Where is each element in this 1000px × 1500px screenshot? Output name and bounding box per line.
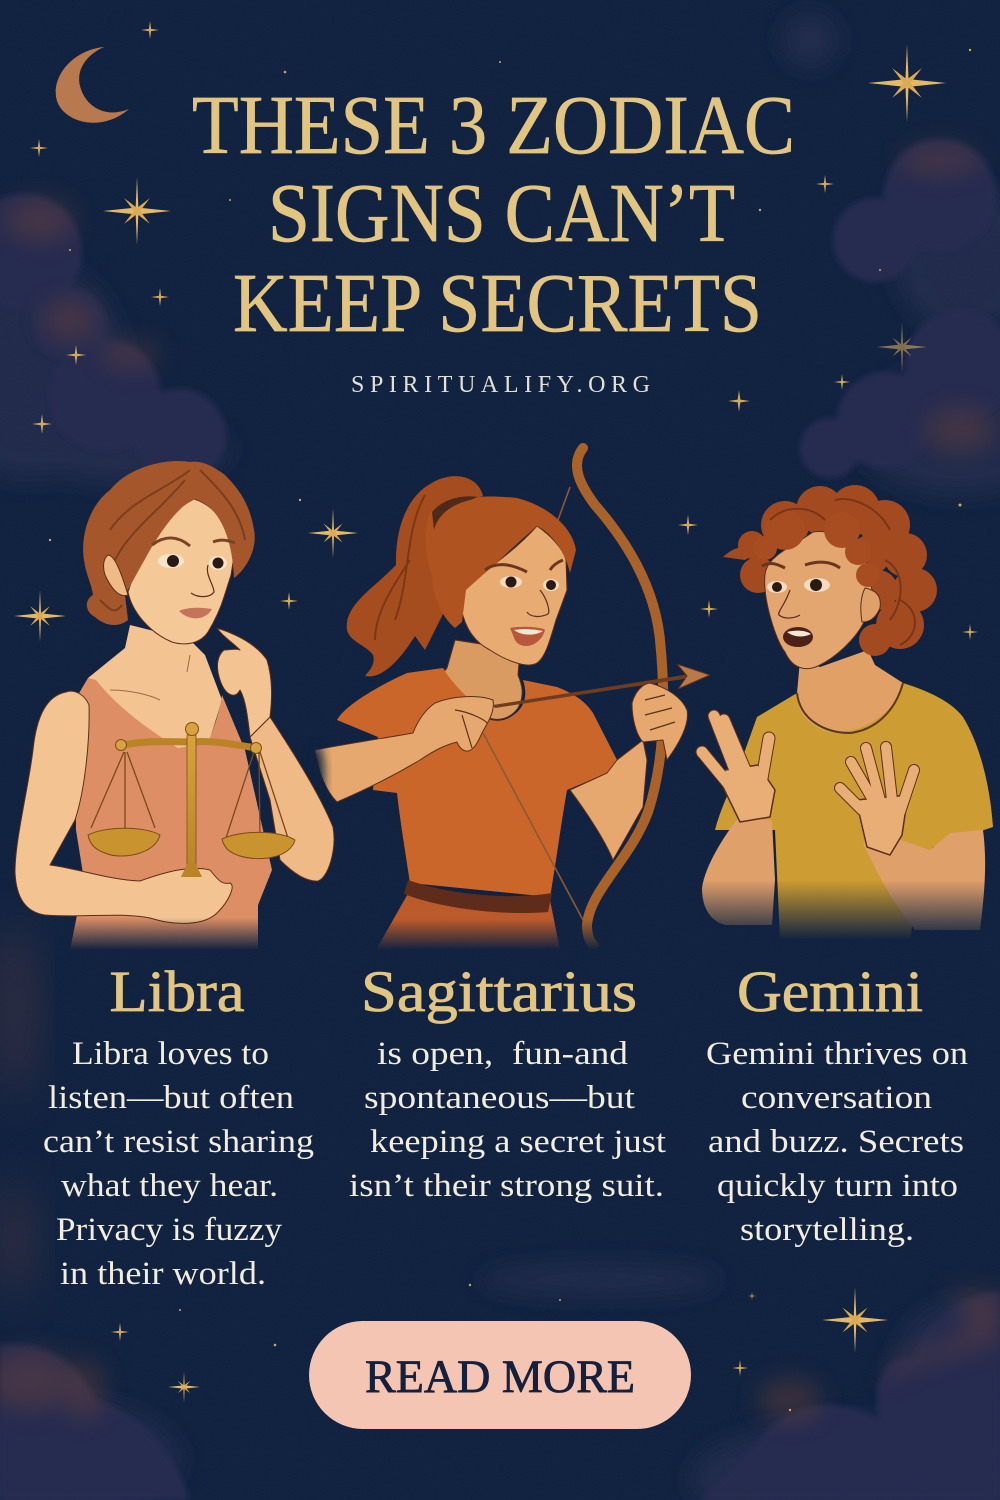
description: storytelling. <box>740 1212 914 1248</box>
skirt and belt <box>377 895 560 948</box>
heading: Sagittarius <box>361 959 637 1024</box>
neck and chest <box>88 625 222 750</box>
website label: SPIRITUALIFY.ORG <box>351 372 650 398</box>
right hand <box>840 747 914 855</box>
bow hand <box>632 683 687 760</box>
shirt <box>715 683 993 940</box>
card: Libra <box>43 959 314 1292</box>
curl lines <box>770 499 915 645</box>
neck <box>437 640 522 719</box>
figure: Gemini <box>702 485 993 940</box>
card: Sagittarius <box>349 959 666 1204</box>
description <box>706 1036 968 1248</box>
button: read more: READ MORE <box>365 1351 635 1403</box>
figure: Sagittarius <box>315 448 710 950</box>
heading: Libra <box>110 959 244 1024</box>
card: Gemini <box>706 959 968 1248</box>
arm fade patch <box>308 743 324 807</box>
collarbone and neck lines <box>110 655 190 700</box>
description: isn’t their strong suit. <box>349 1168 664 1204</box>
face details <box>762 562 840 647</box>
description: Privacy is fuzzy <box>56 1212 283 1248</box>
hair tie <box>432 496 478 530</box>
viewer-left arm <box>702 818 775 925</box>
drawing hand details <box>455 710 487 748</box>
description <box>43 1036 314 1292</box>
description: conversation <box>741 1080 932 1116</box>
title: SIGNS CAN’T <box>268 167 735 260</box>
description: Gemini thrives on <box>706 1036 968 1072</box>
description: can’t resist sharing <box>43 1124 314 1160</box>
title <box>192 79 795 350</box>
face details <box>152 538 235 618</box>
face <box>128 499 235 644</box>
bow string <box>483 487 583 920</box>
hair front <box>426 496 576 628</box>
ponytail <box>347 476 483 676</box>
description: listen—but often <box>48 1080 294 1116</box>
title: THESE 3 ZODIAC <box>192 79 795 172</box>
description: what they hear. <box>61 1168 278 1204</box>
moon crescent <box>56 47 129 123</box>
arm drawing the arrow <box>315 697 493 802</box>
viewer-right arm <box>250 717 334 881</box>
face <box>765 532 872 669</box>
hair <box>83 461 255 625</box>
button: read more <box>309 1321 691 1429</box>
neck <box>797 650 903 732</box>
heading: Gemini <box>737 959 923 1024</box>
figure: Libra <box>15 461 334 950</box>
left hand <box>702 716 775 822</box>
right arm <box>570 740 647 860</box>
arrow <box>493 664 710 708</box>
hair strands <box>100 470 245 610</box>
scales <box>88 722 295 877</box>
curly hair front <box>753 510 880 587</box>
title: KEEP SECRETS <box>233 257 762 350</box>
raised hand <box>217 628 272 737</box>
dress <box>70 678 272 950</box>
ponytail strands <box>375 495 425 640</box>
description: spontaneous—but <box>364 1080 635 1116</box>
ear <box>104 555 128 596</box>
face details <box>485 560 563 646</box>
shirt <box>337 668 617 897</box>
description: Libra loves to <box>72 1036 269 1072</box>
ear <box>438 570 462 612</box>
description: in their world. <box>60 1256 266 1292</box>
description: keeping a secret just <box>370 1124 666 1160</box>
description <box>349 1036 666 1204</box>
curly hair back <box>723 485 937 656</box>
ear <box>861 588 880 622</box>
face <box>460 526 567 665</box>
viewer-right arm <box>863 830 985 930</box>
viewer-left arm <box>15 691 232 923</box>
description: is open, fun-and <box>377 1036 629 1072</box>
description: quickly turn into <box>717 1168 958 1204</box>
collar line <box>797 683 903 733</box>
description: and buzz. Secrets <box>708 1124 964 1160</box>
bow <box>577 448 663 946</box>
